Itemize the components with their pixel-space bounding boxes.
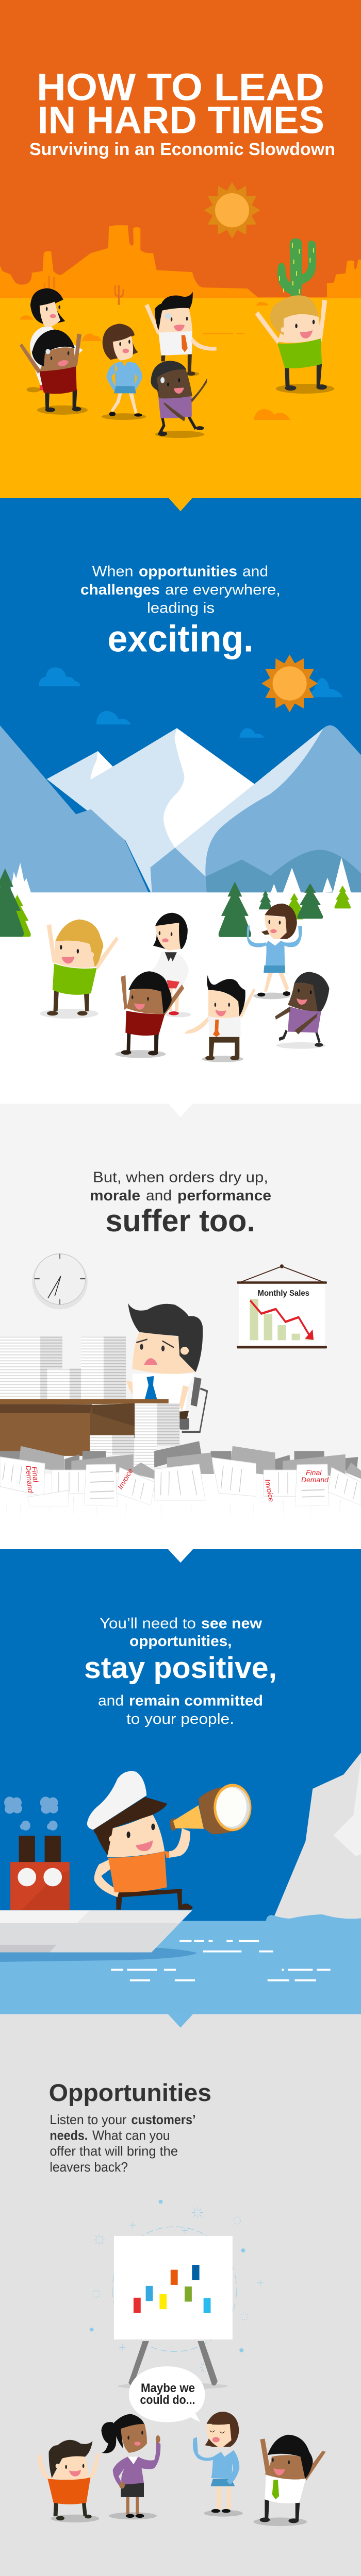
figure: man in white shirt with orange tie xyxy=(144,292,217,376)
figure: man in red shirt cheering xyxy=(115,971,184,1058)
text: see new opportunities: to your people. xyxy=(126,1711,234,1727)
subtitle: Surviving in an Economic Slowdown xyxy=(29,140,335,159)
icon: ship xyxy=(0,1797,192,1953)
desert bushes xyxy=(20,302,290,420)
text: morale and performance xyxy=(90,1170,271,1238)
text: morale and performance: suffer too. xyxy=(105,1204,255,1238)
figure: worried manager xyxy=(126,1303,207,1432)
text: leading is exciting: opportunities xyxy=(139,564,237,580)
title: IN HARD TIMES xyxy=(38,98,324,141)
ship illustration xyxy=(0,1549,361,2014)
hero illustration xyxy=(0,0,361,499)
figure: woman with ponytail xyxy=(101,2414,160,2519)
text: leading is exciting: leading is xyxy=(147,600,215,616)
opportunities background xyxy=(0,2014,361,2576)
icon: desert sun xyxy=(204,182,260,239)
whiteboard scene xyxy=(37,2200,326,2526)
figure: man with orange tie cheering xyxy=(184,975,256,1062)
sea xyxy=(0,1914,361,2014)
figure: man in green shirt xyxy=(255,295,334,394)
text: morale and performance: morale xyxy=(90,1188,140,1204)
snowy mountains xyxy=(0,725,361,893)
speech bubble text xyxy=(140,2381,195,2407)
figure: man in orange shirt xyxy=(37,2440,99,2522)
figure: woman in white top cheering xyxy=(152,913,191,1017)
handwritten invoice notes: Demand xyxy=(301,1476,329,1484)
title xyxy=(37,66,324,141)
pine trees xyxy=(0,869,351,937)
text: leading is exciting xyxy=(80,564,281,660)
icon: wall clock xyxy=(32,1254,88,1309)
figure: woman in blue top speaking xyxy=(193,2412,243,2517)
text: listen to customers: Listen to your xyxy=(50,2112,127,2127)
text: see new opportunities: see new xyxy=(201,1616,262,1632)
panel: stay positive ship xyxy=(0,1549,361,2014)
chart: monthly sales poster xyxy=(237,1264,327,1348)
text: morale and performance: and xyxy=(146,1188,172,1204)
text: listen to customers: What can you xyxy=(92,2128,170,2143)
handwritten invoice notes: Invoice xyxy=(116,1467,135,1491)
text: leading is exciting: challenges xyxy=(80,582,160,598)
text: leading is exciting: When xyxy=(92,564,134,580)
text: listen to customers: customers’ xyxy=(131,2112,196,2127)
figure: woman in blue top cheering xyxy=(247,904,302,999)
text: leading is exciting: are everywhere, xyxy=(165,582,281,598)
icon: green cactus xyxy=(277,238,316,296)
clouds xyxy=(39,667,343,738)
text: leading is exciting: and xyxy=(242,564,268,580)
mountain illustration xyxy=(0,498,361,1104)
figure: man in green shirt cheering xyxy=(40,919,119,1019)
panel: exciting mountains xyxy=(0,498,361,1104)
panel: morale suffers xyxy=(0,1104,361,1550)
small distant cacti xyxy=(44,276,124,305)
text: see new opportunities: opportunities, xyxy=(129,1633,232,1650)
desert mesa silhouette xyxy=(0,225,361,298)
figure: man in purple shirt xyxy=(151,361,207,438)
chart title: Monthly Sales xyxy=(258,1289,309,1298)
text: listen to customers: offer that will bring the xyxy=(50,2143,178,2159)
figure: captain with telescope xyxy=(87,1771,193,1910)
handwritten invoice notes: Final xyxy=(306,1468,322,1477)
text: morale and performance: performance xyxy=(177,1188,271,1204)
paper stacks beside desk xyxy=(90,1403,179,1466)
handwritten invoice notes: Demand xyxy=(24,1465,35,1494)
text: see new opportunities: remain committed xyxy=(129,1693,263,1709)
handwritten invoice notes: Invoice xyxy=(264,1479,276,1502)
speech bubble text: could do... xyxy=(140,2393,195,2407)
panel: opportunities xyxy=(0,2014,361,2576)
paper stacks on desk xyxy=(0,1336,126,1399)
figure: man in red shirt xyxy=(20,330,88,415)
text: leading is exciting: exciting. xyxy=(107,619,254,660)
office illustration xyxy=(0,1104,361,1550)
icon: iceberg xyxy=(274,1753,361,1921)
decorative sparkles around whiteboard xyxy=(93,2207,264,2373)
text: listen to customers: needs. xyxy=(50,2128,88,2143)
text: listen to customers: leavers back? xyxy=(50,2159,128,2175)
handwritten invoice notes xyxy=(24,1465,329,1502)
text: morale and performance: But, when orders dry up, xyxy=(93,1170,268,1186)
speech bubble text: Maybe we xyxy=(141,2381,195,2395)
text: see new opportunities: You’ll need to xyxy=(100,1616,196,1632)
text: see new opportunities: and xyxy=(98,1693,124,1709)
figure: man in purple shirt cheering xyxy=(275,972,329,1049)
handwritten invoice notes: Final xyxy=(30,1466,40,1483)
figure: woman in white top xyxy=(26,288,83,392)
title: HOW TO LEAD xyxy=(37,66,324,108)
text: see new opportunities: stay positive, xyxy=(84,1651,277,1685)
figure: woman in blue top xyxy=(102,324,146,420)
wooden desk xyxy=(0,1399,169,1456)
panel: hero desert xyxy=(0,0,361,499)
figure: man with green tie xyxy=(254,2435,326,2526)
heading: opportunities: Opportunities xyxy=(49,2079,211,2106)
whiteboard with sticky notes xyxy=(114,2236,233,2389)
icon: sun xyxy=(261,654,318,713)
pile of invoices xyxy=(0,1441,361,1550)
icon: telescope xyxy=(170,1784,252,1834)
text: listen to customers xyxy=(50,2112,196,2175)
speech bubble xyxy=(129,2366,205,2422)
text: see new opportunities xyxy=(84,1616,277,1727)
